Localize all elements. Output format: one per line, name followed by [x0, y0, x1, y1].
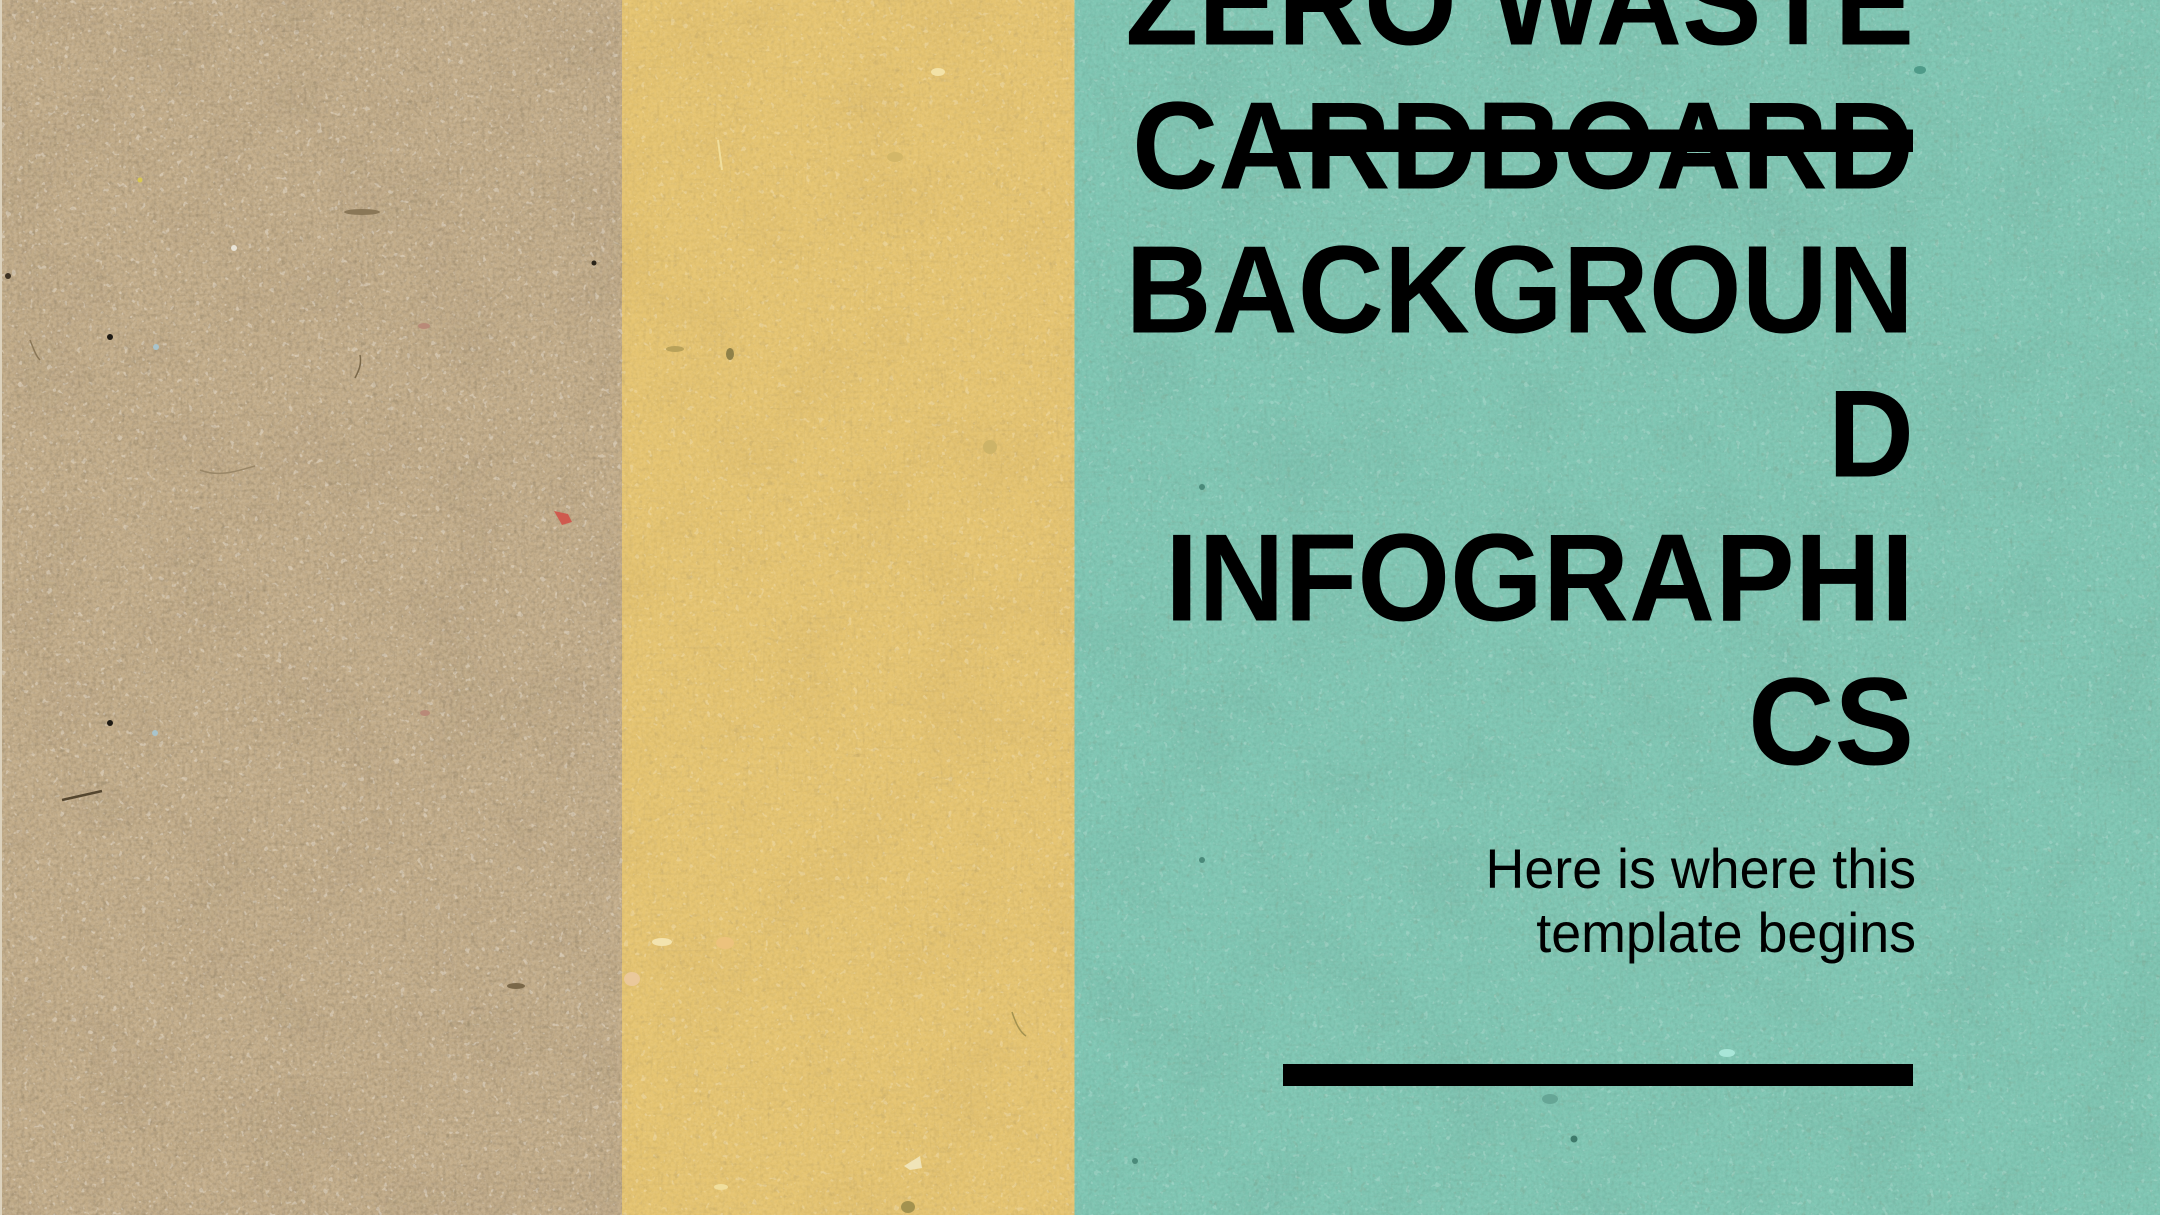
title: D — [1828, 365, 1914, 503]
panel: teal paper — [1074, 0, 2160, 1215]
title: INFOGRAPHI — [1165, 509, 1914, 647]
subtitle: Here is where this — [1486, 837, 1916, 900]
panel: brown kraft paper — [0, 0, 622, 1215]
subtitle — [1486, 837, 1916, 964]
title: BACKGROUN — [1125, 221, 1914, 359]
subtitle: template begins — [1536, 901, 1916, 964]
strikethrough bar across cardboard — [1281, 130, 1913, 152]
panel: yellow paper — [622, 0, 1074, 1215]
title: CARDBOARD — [1132, 76, 1914, 215]
title: CS — [1748, 653, 1914, 791]
decorative bar below subtitle — [1283, 1064, 1913, 1086]
title — [1125, 0, 1914, 791]
